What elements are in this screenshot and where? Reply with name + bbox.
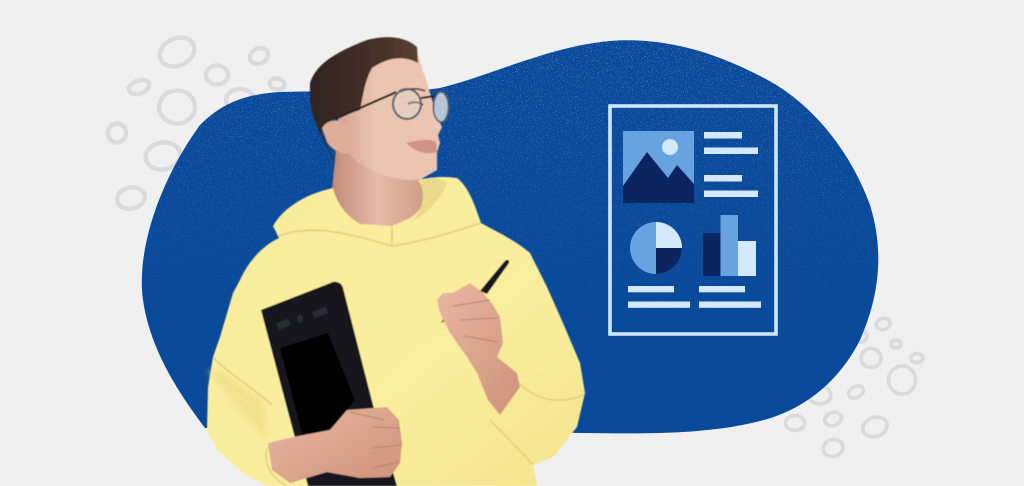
caption lines [628, 286, 761, 308]
hair [310, 37, 418, 165]
upper hand [437, 283, 520, 415]
illustration scene [106, 35, 925, 486]
neck [332, 150, 432, 232]
hood inner shadow [412, 178, 447, 222]
lips [406, 140, 437, 153]
text lines beside image [704, 132, 758, 197]
lower hand [268, 407, 402, 483]
decorative rings: upper left [108, 32, 286, 211]
hoodie [207, 177, 585, 486]
document icon [610, 106, 776, 334]
finger lines [350, 300, 498, 468]
blue blob background [130, 30, 890, 440]
eyebrow and eye [400, 89, 425, 105]
ear [322, 120, 356, 154]
sleeve shadow [208, 370, 268, 440]
decorative rings: lower right [786, 316, 923, 459]
tablet [261, 282, 397, 486]
document frame [610, 106, 776, 334]
image placeholder with mountains and sun [623, 131, 694, 203]
stylus [441, 260, 509, 323]
glasses [335, 89, 448, 122]
man with tablet and stylus [207, 37, 585, 486]
head [310, 37, 442, 180]
pie chart [630, 222, 682, 274]
bar chart [703, 215, 756, 276]
hood folds [213, 223, 584, 486]
